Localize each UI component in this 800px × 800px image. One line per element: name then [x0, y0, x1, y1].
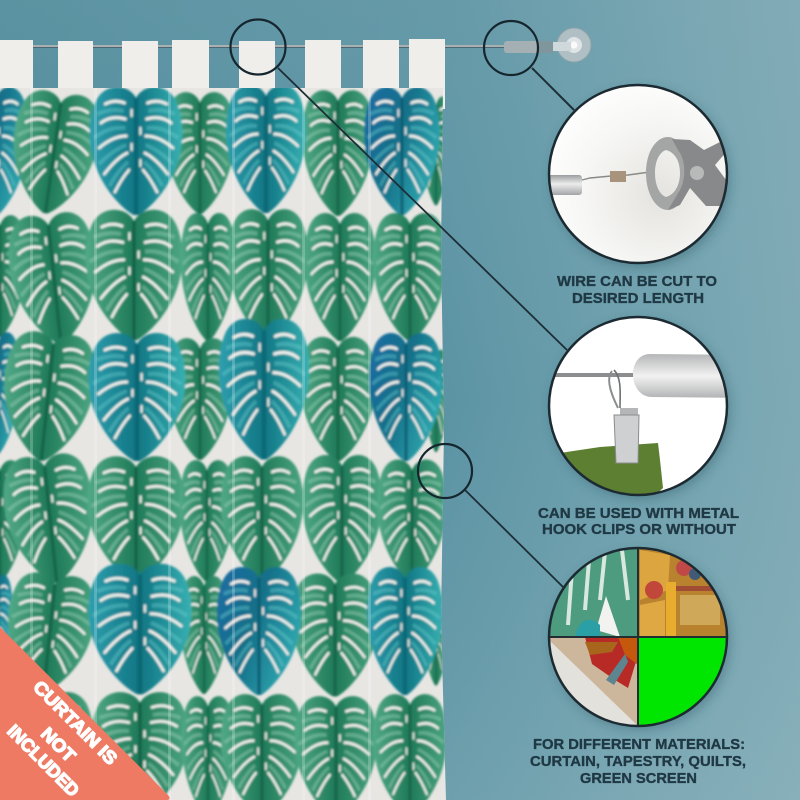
aluminium tube	[633, 354, 726, 398]
caption: materials: FOR DIFFERENT MATERIALS:	[533, 736, 745, 753]
callout leader line: wire end to cutting detail	[532, 68, 574, 110]
detail circle: metal hook clips	[549, 317, 745, 500]
detail circle: wire cut with pliers	[540, 85, 732, 263]
green fabric sample	[564, 443, 663, 494]
quadrant: green screen	[638, 637, 727, 726]
aluminium wire end	[550, 175, 582, 195]
caption: hook clips	[538, 505, 739, 538]
corner banner: curtain is not included	[0, 627, 170, 800]
caption: materials: CURTAIN, TAPESTRY, QUILTS,	[530, 753, 746, 770]
quadrant dividers	[549, 548, 727, 726]
caption: hook clips: CAN BE USED WITH METAL	[538, 505, 739, 522]
quadrant: quilt	[549, 637, 638, 726]
curtain fabric with monstera leaf print	[0, 85, 452, 800]
wire	[550, 373, 635, 377]
caption: wire cutting	[557, 273, 717, 307]
pliers	[646, 137, 732, 210]
corner banner: curtain is not included: CURTAIN IS	[29, 677, 121, 769]
caption: wire cutting: WIRE CAN BE CUT TO	[557, 273, 717, 290]
curtain tabs	[0, 39, 445, 109]
small callout ring on curtain edge	[418, 444, 472, 498]
quadrant: curtain fabric	[549, 548, 638, 637]
caption: hook clips: HOOK CLIPS OR WITHOUT	[542, 521, 736, 538]
hook clip	[609, 370, 639, 463]
caption: wire cutting: DESIRED LENGTH	[572, 290, 704, 307]
monstera leaves pattern	[0, 85, 452, 800]
small callout ring on tab	[230, 20, 286, 74]
caption: materials	[530, 736, 746, 787]
corner banner: curtain is not included: NOT	[37, 724, 79, 766]
callout leader line: curtain edge to materials detail	[465, 490, 563, 587]
quadrant: tapestry	[638, 548, 727, 637]
wire with ferrule	[582, 172, 650, 180]
caption: materials: GREEN SCREEN	[580, 770, 697, 787]
detail circle: four materials	[549, 548, 727, 726]
callout leader line: tab to hook clips detail	[278, 68, 567, 350]
corner banner: curtain is not included: INCLUDED	[3, 721, 83, 800]
fabric pleat shading	[30, 88, 371, 800]
wire rod	[0, 45, 520, 48]
wall mount hardware	[504, 28, 591, 62]
small callout ring on wire end	[484, 21, 538, 75]
